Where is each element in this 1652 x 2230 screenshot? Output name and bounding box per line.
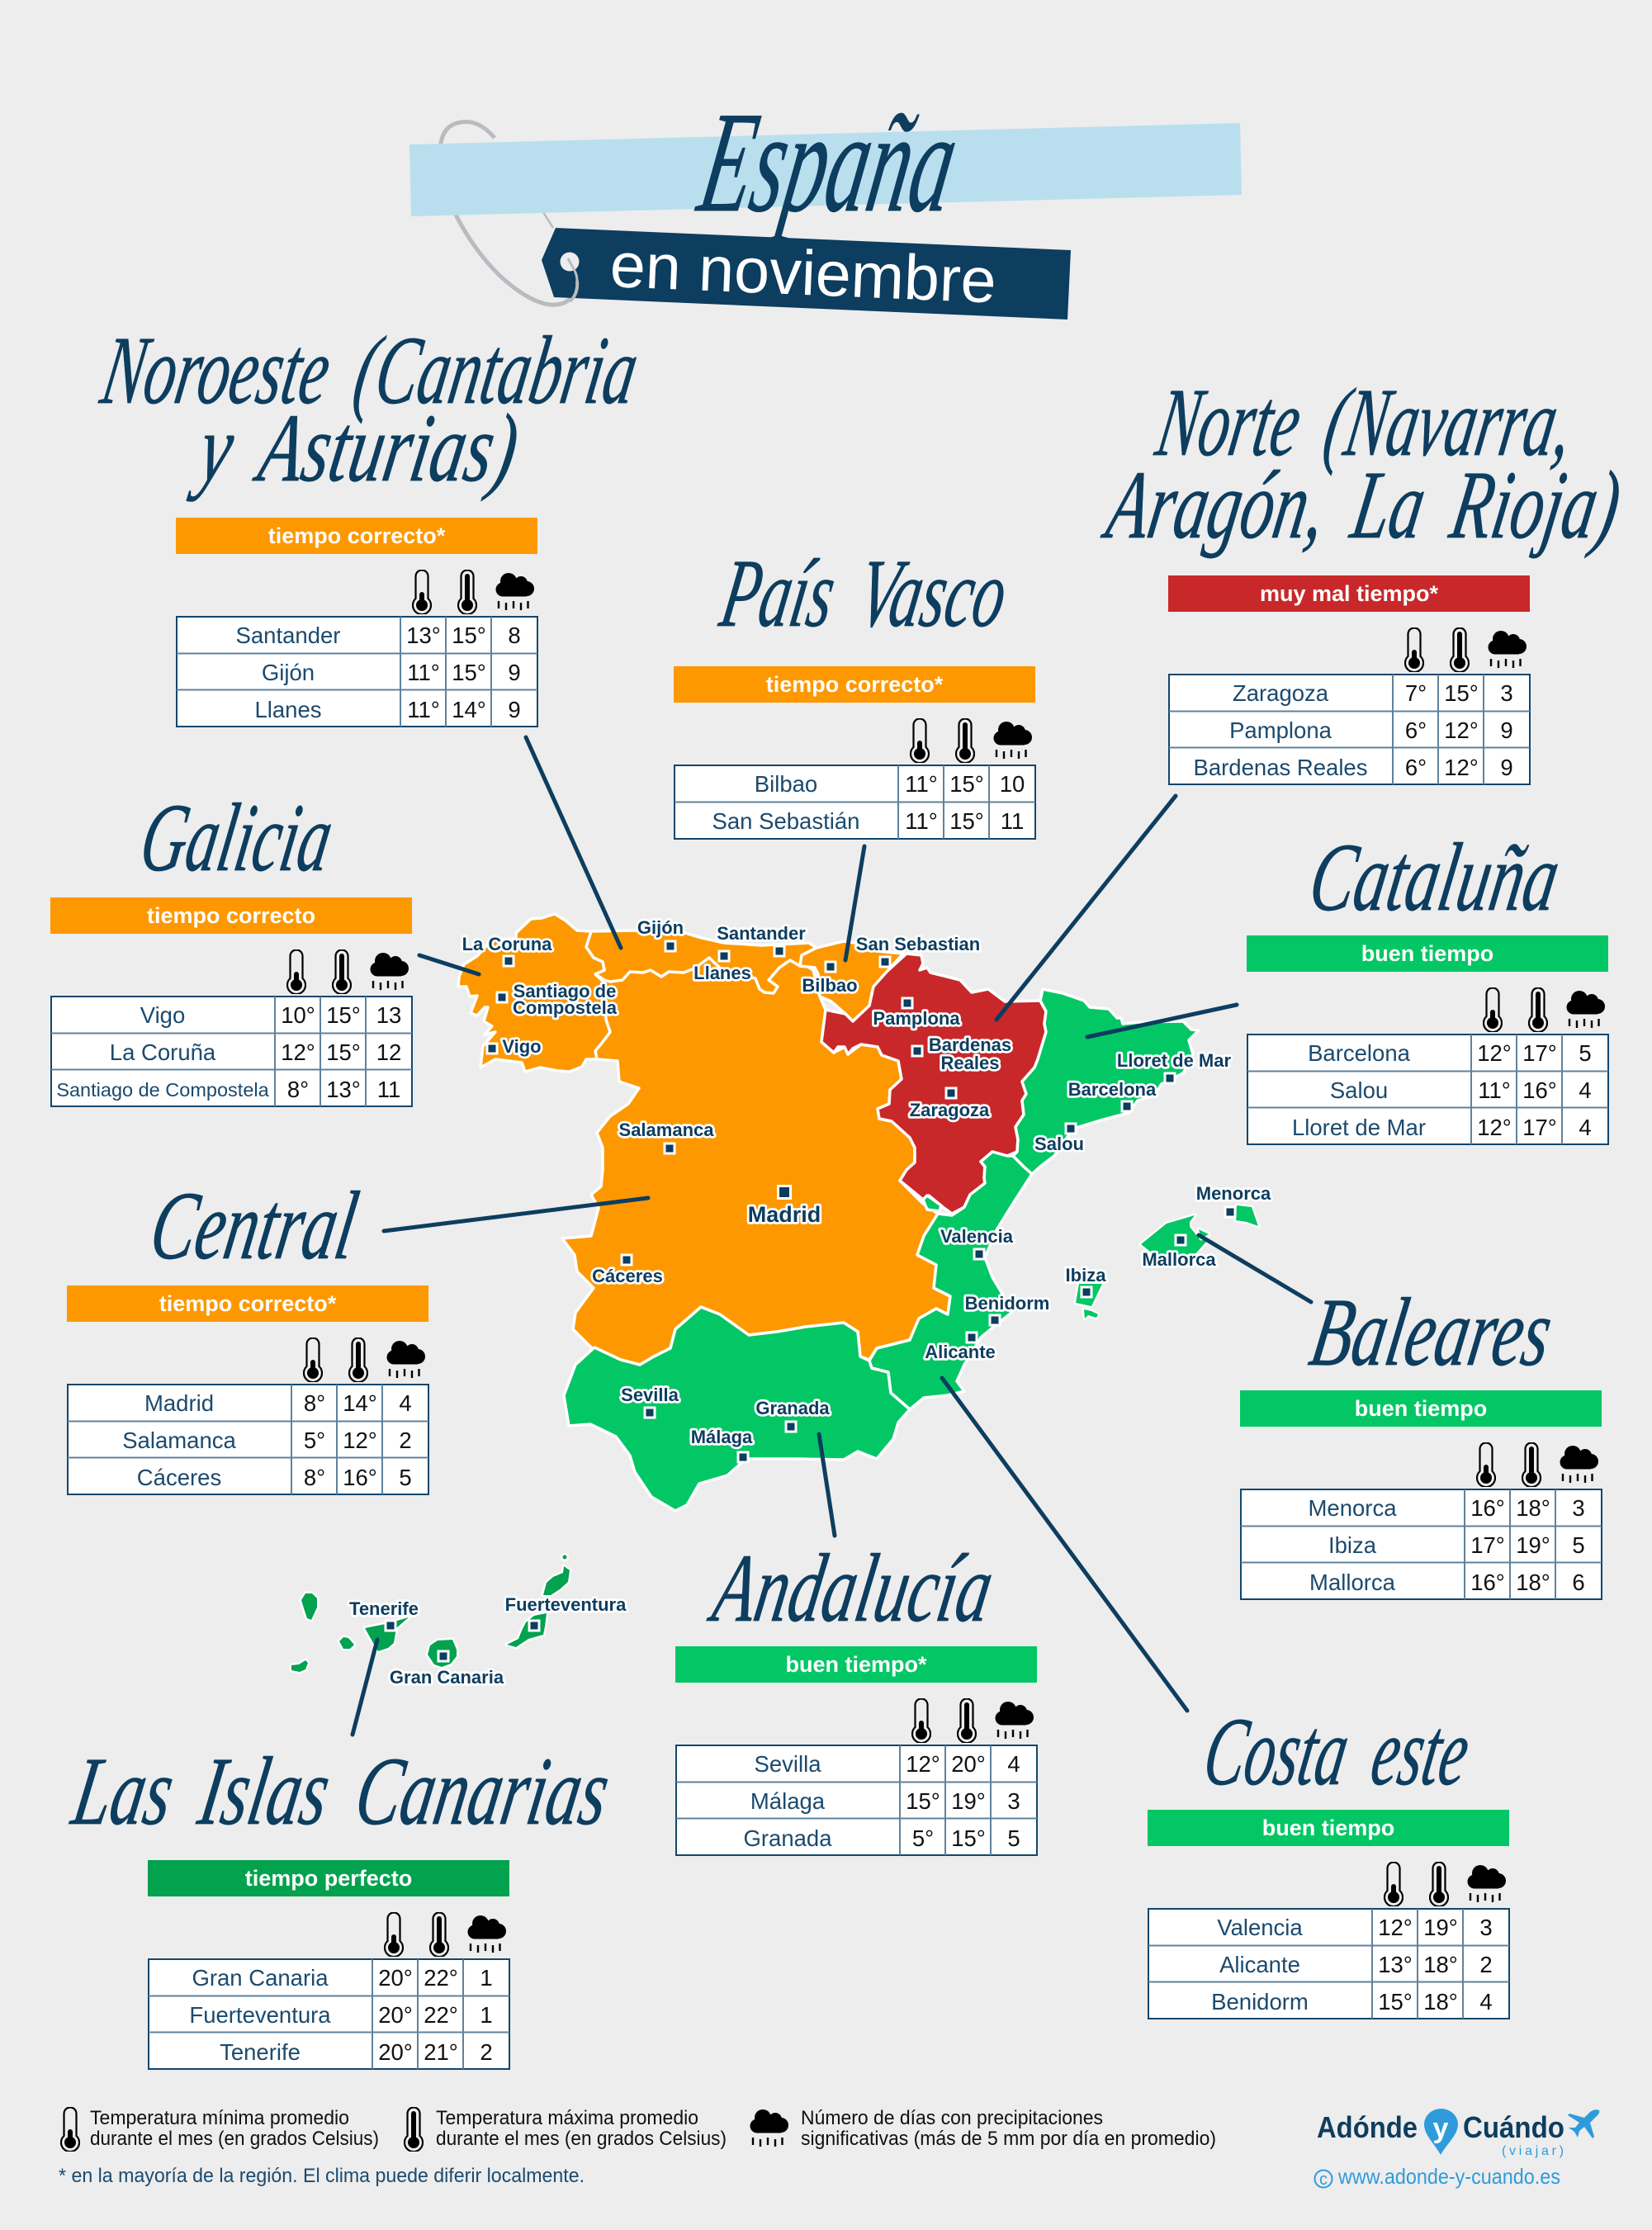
- table: Tenerife: [220, 2039, 301, 2065]
- panel: Las Islas Canarias: [148, 1860, 509, 2069]
- table: 5: [1007, 1825, 1020, 1851]
- subtitle tag: en noviembre: [608, 230, 997, 317]
- table: 5°: [912, 1825, 934, 1851]
- connector lines: [353, 737, 1311, 1735]
- map of Spain: [291, 914, 1258, 1672]
- table: 15°: [326, 1039, 361, 1065]
- table: 11°: [407, 697, 440, 722]
- heading: Norte: [1096, 368, 1629, 559]
- table: 16°: [1522, 1077, 1557, 1103]
- table: 20°: [378, 2039, 413, 2065]
- title band: [409, 123, 1242, 216]
- table: [1247, 1035, 1608, 1144]
- table: 1: [480, 1965, 493, 1991]
- table: 19°: [1423, 1915, 1458, 1940]
- table: 15°: [452, 660, 486, 685]
- table: Santiago de Compostela: [56, 1079, 270, 1101]
- table: 13°: [1378, 1952, 1413, 1977]
- legend: precipitation: Número de días con precipitaciones: [801, 2107, 1103, 2129]
- status banner: [1148, 1810, 1509, 1846]
- table: 6: [1572, 1570, 1585, 1595]
- table: 14°: [452, 697, 486, 722]
- table: 12°: [1477, 1115, 1512, 1140]
- legend: precipitation: significativas (más de 5 mm por día en promedio): [801, 2128, 1216, 2150]
- status banner: buen tiempo: [1355, 1396, 1487, 1421]
- table: 10°: [281, 1002, 315, 1028]
- logo: Adónde: [1317, 2110, 1418, 2144]
- panel: Central: [67, 1285, 428, 1494]
- table: 4: [1479, 1989, 1493, 2015]
- heading: Galicia: Galicia: [133, 784, 341, 892]
- table: Lloret de Mar: [1292, 1115, 1426, 1140]
- status banner: tiempo correcto: [147, 903, 315, 928]
- city markers: [386, 941, 1235, 1661]
- icons: [912, 1699, 1034, 1743]
- table: 10: [1000, 771, 1025, 797]
- panel: Cataluña: [1247, 935, 1608, 1144]
- table: 5°: [304, 1427, 325, 1453]
- website: c: [1319, 2171, 1328, 2189]
- table: 15°: [326, 1002, 361, 1028]
- table: 20°: [378, 2002, 413, 2028]
- table: 18°: [1423, 1952, 1458, 1977]
- legend: precipitation: [750, 2107, 1216, 2150]
- table: Fuerteventura: [189, 2002, 331, 2028]
- table: 9: [1500, 755, 1513, 780]
- city labels: La Coruna: [462, 934, 552, 954]
- status banner: buen tiempo*: [785, 1652, 927, 1677]
- icons: [287, 949, 409, 994]
- status banner: tiempo correcto*: [766, 672, 944, 697]
- table: 18°: [1516, 1495, 1550, 1521]
- table: 22°: [424, 2002, 458, 2028]
- table: Gran Canaria: [192, 1965, 329, 1991]
- logo: (viajar): [1502, 2144, 1564, 2158]
- icons: [1477, 1443, 1598, 1487]
- table: 8°: [304, 1465, 325, 1490]
- status banner: [176, 518, 537, 554]
- table: 15°: [951, 1825, 986, 1851]
- table: Menorca: [1308, 1495, 1397, 1521]
- city labels: Salou: [1034, 1134, 1084, 1154]
- table: 15°: [1378, 1989, 1413, 2015]
- table: 3: [1007, 1788, 1020, 1814]
- table: Barcelona: [1308, 1040, 1411, 1066]
- table: 11°: [905, 771, 938, 797]
- table: 9: [508, 697, 521, 722]
- icons: [1484, 987, 1605, 1032]
- heading: Costa este: Costa este: [1196, 1697, 1478, 1806]
- table: Vigo: [140, 1002, 185, 1028]
- table: [177, 617, 537, 727]
- city labels: Valencia: [940, 1226, 1014, 1247]
- region: Galicia: [458, 914, 610, 1072]
- heading: Noroeste: y Asturias): [186, 394, 527, 502]
- icons: [385, 1912, 506, 1957]
- table: 9: [508, 660, 521, 685]
- region: País Vasco: [800, 941, 903, 1021]
- table: Pamplona: [1229, 717, 1332, 743]
- logo: [1317, 2109, 1599, 2158]
- city labels: Reales: [941, 1053, 999, 1073]
- table: Madrid: [144, 1390, 214, 1416]
- logo: Cuándo: [1463, 2110, 1564, 2144]
- table: Benidorm: [1211, 1989, 1309, 2015]
- heading: País Vasco: País Vasco: [713, 539, 1015, 647]
- city labels: Pamplona: [873, 1008, 960, 1029]
- table: 12°: [906, 1751, 940, 1777]
- table: Cáceres: [137, 1465, 221, 1490]
- heading: Noroeste: Noroeste (Cantabria: [94, 316, 646, 424]
- table: 8°: [304, 1390, 325, 1416]
- status banner: [1240, 1390, 1602, 1427]
- status banner: buen tiempo: [1262, 1816, 1394, 1840]
- table: 12°: [1477, 1040, 1512, 1066]
- table: 11: [377, 1077, 400, 1102]
- city labels: Menorca: [1196, 1183, 1271, 1204]
- table: 18°: [1516, 1570, 1550, 1595]
- city labels: Salamanca: [619, 1120, 714, 1140]
- table: 11°: [407, 660, 440, 685]
- city labels: Madrid: [748, 1202, 821, 1227]
- table: Granada: [743, 1825, 832, 1851]
- table: 16°: [343, 1465, 377, 1490]
- city labels: Sevilla: [621, 1385, 679, 1405]
- table: Sevilla: [754, 1751, 821, 1777]
- legend: minimum temperature: durante el mes (en grados Celsius): [90, 2128, 379, 2150]
- legend: maximum temperature: [405, 2107, 727, 2152]
- table: 20°: [378, 1965, 413, 1991]
- table: 15°: [949, 808, 984, 834]
- table: 6°: [1405, 755, 1427, 780]
- city labels: Zaragoza: [910, 1100, 990, 1120]
- table: [51, 997, 412, 1106]
- panel: Costa este: [1148, 1810, 1509, 2019]
- city labels: Gran Canaria: [390, 1667, 504, 1688]
- region: Central: [562, 954, 950, 1365]
- table: 3: [1500, 680, 1513, 706]
- status banner: [1168, 575, 1530, 612]
- status banner: [675, 1646, 1037, 1683]
- table: 20°: [951, 1751, 986, 1777]
- icons: [1385, 1863, 1506, 1906]
- city labels: Compostela: [513, 997, 618, 1018]
- table: Ibiza: [1328, 1532, 1377, 1558]
- legend: minimum temperature: Temperatura mínima promedio: [90, 2107, 349, 2129]
- table: [676, 1745, 1037, 1855]
- table: La Coruña: [110, 1039, 216, 1065]
- panel: Galicia: [50, 897, 412, 1106]
- icons: [1405, 627, 1527, 672]
- status banner: [1247, 935, 1608, 972]
- table: 7°: [1405, 680, 1427, 706]
- table: 11: [1001, 808, 1024, 834]
- city labels: Fuerteventura: [505, 1594, 627, 1615]
- table: 18°: [1423, 1989, 1458, 2015]
- table: 17°: [1470, 1532, 1505, 1558]
- title tag string: [440, 122, 577, 305]
- table: 8°: [287, 1077, 309, 1102]
- table: 2: [399, 1427, 412, 1453]
- table: 12: [376, 1039, 401, 1065]
- status banner: tiempo correcto*: [159, 1291, 337, 1316]
- city labels: Mallorca: [1142, 1249, 1216, 1270]
- table: 19°: [951, 1788, 986, 1814]
- region: Cataluña: [1013, 989, 1199, 1174]
- table: [149, 1959, 509, 2069]
- panel: Baleares: [1240, 1390, 1602, 1599]
- table: San Sebastián: [712, 808, 859, 834]
- table: Bardenas Reales: [1194, 755, 1367, 780]
- table: 13°: [406, 623, 441, 648]
- website: www.adonde-y-cuando.es: [1337, 2164, 1560, 2189]
- city labels: Tenerife: [349, 1598, 419, 1619]
- icons: [911, 718, 1032, 763]
- table: 3: [1572, 1495, 1585, 1521]
- table: 14°: [343, 1390, 377, 1416]
- table: 13°: [326, 1077, 361, 1102]
- table: [68, 1385, 428, 1494]
- city labels: Gijón: [637, 917, 684, 938]
- table: 9: [1500, 717, 1513, 743]
- table: 19°: [1516, 1532, 1550, 1558]
- table: 22°: [424, 1965, 458, 1991]
- heading: Las Islas Canarias: Las Islas Canarias: [64, 1737, 618, 1845]
- status banner: tiempo perfecto: [245, 1866, 412, 1891]
- table: 12°: [1378, 1915, 1413, 1940]
- city labels: Bilbao: [802, 975, 858, 996]
- table: 4: [399, 1390, 412, 1416]
- table: 11°: [1478, 1077, 1511, 1103]
- table: 11°: [905, 808, 938, 834]
- panel: País Vasco: [674, 666, 1035, 839]
- table: 4: [1579, 1115, 1592, 1140]
- table: Málaga: [750, 1788, 826, 1814]
- city labels: Granada: [755, 1398, 830, 1418]
- table: 4: [1007, 1751, 1020, 1777]
- city labels: Vigo: [502, 1036, 542, 1057]
- table: 12°: [281, 1039, 315, 1065]
- table: 5: [1579, 1040, 1592, 1066]
- table: 17°: [1522, 1115, 1557, 1140]
- panel: Andalucía: [675, 1646, 1037, 1855]
- legend: maximum temperature: durante el mes (en grados Celsius): [436, 2128, 727, 2150]
- city labels: Santiago de: [514, 981, 616, 1001]
- title: España: España: [688, 83, 968, 243]
- subtitle tag: [542, 228, 1071, 320]
- city labels: Bardenas: [929, 1035, 1011, 1055]
- table: Santander: [236, 623, 340, 648]
- table: Zaragoza: [1233, 680, 1329, 706]
- region: Noroeste: [586, 930, 817, 993]
- status banner: buen tiempo: [1361, 941, 1493, 966]
- table: 12°: [343, 1427, 377, 1453]
- panel: Noroeste: [176, 518, 537, 727]
- status banner: [50, 897, 412, 934]
- logo: y: [1433, 2113, 1449, 2144]
- table: 13: [376, 1002, 401, 1028]
- city labels: San Sebastian: [856, 934, 980, 954]
- table: [1169, 675, 1530, 784]
- icons: [413, 570, 534, 614]
- region: enclave: [923, 1195, 941, 1211]
- city labels: [349, 917, 1271, 1688]
- city labels: Barcelona: [1068, 1079, 1157, 1100]
- heading: Noroeste: [94, 316, 646, 502]
- region: Baleares: [1076, 1205, 1258, 1319]
- table: Gijón: [262, 660, 315, 685]
- table: Salamanca: [122, 1427, 236, 1453]
- table: [675, 765, 1035, 839]
- table: Bilbao: [755, 771, 817, 797]
- table: 15°: [906, 1788, 940, 1814]
- table: Llanes: [254, 697, 322, 722]
- status banner: [67, 1285, 428, 1322]
- table: Salou: [1330, 1077, 1388, 1103]
- status banner: [674, 666, 1035, 703]
- table: 16°: [1470, 1570, 1505, 1595]
- table: 16°: [1470, 1495, 1505, 1521]
- table: 12°: [1444, 755, 1479, 780]
- table: 2: [1479, 1952, 1493, 1977]
- table: Alicante: [1219, 1952, 1300, 1977]
- city labels: Cáceres: [592, 1266, 663, 1286]
- region: Canarias: [291, 1555, 570, 1672]
- table: [1148, 1909, 1509, 2019]
- city labels: Santander: [717, 923, 806, 944]
- heading: Central: Central: [143, 1172, 366, 1280]
- table: 5: [399, 1465, 412, 1490]
- table: Valencia: [1217, 1915, 1303, 1940]
- table: 15°: [1444, 680, 1479, 706]
- legend: maximum temperature: Temperatura máxima promedio: [436, 2107, 698, 2129]
- table: 2: [480, 2039, 493, 2065]
- city labels: Benidorm: [965, 1293, 1049, 1314]
- city labels: Alicante: [925, 1342, 996, 1362]
- table: 15°: [949, 771, 984, 797]
- region: Costa este: [869, 1152, 1032, 1409]
- table: [1241, 1489, 1602, 1599]
- table: 3: [1479, 1915, 1493, 1940]
- table: 15°: [452, 623, 486, 648]
- table: 6°: [1405, 717, 1427, 743]
- heading: Andalucía: Andalucía: [703, 1534, 1001, 1642]
- region: Norte: [821, 954, 1046, 1214]
- table: 12°: [1444, 717, 1479, 743]
- panel: Norte: [1168, 575, 1530, 784]
- city labels: Ibiza: [1066, 1265, 1106, 1285]
- icon: location pin: [1424, 2109, 1458, 2155]
- table: 4: [1579, 1077, 1592, 1103]
- region: Andalucía: [564, 1307, 910, 1511]
- table: 21°: [424, 2039, 458, 2065]
- legend: [61, 2107, 1216, 2152]
- table: Mallorca: [1309, 1570, 1396, 1595]
- table: 1: [480, 2002, 493, 2028]
- icons: [304, 1338, 425, 1382]
- city labels: Málaga: [691, 1427, 753, 1447]
- table: 5: [1572, 1532, 1585, 1558]
- status banner: tiempo correcto*: [268, 523, 446, 548]
- legend: minimum temperature: [61, 2107, 379, 2152]
- city labels: Lloret de Mar: [1117, 1050, 1232, 1071]
- status banner: muy mal tiempo*: [1260, 581, 1439, 606]
- table: 17°: [1522, 1040, 1557, 1066]
- footnote: * en la mayoría de la región. El clima puede diferir localmente.: [59, 2165, 585, 2187]
- city labels: Llanes: [693, 963, 751, 983]
- status banner: [148, 1860, 509, 1896]
- table: 8: [508, 623, 521, 648]
- icon: plane: [1568, 2109, 1599, 2138]
